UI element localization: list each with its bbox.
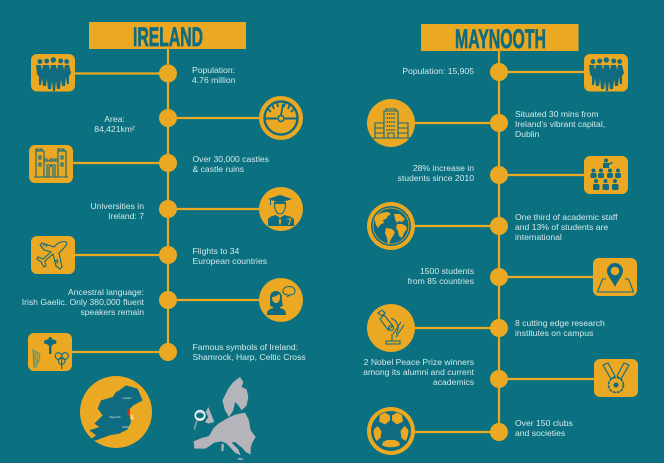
text: language: Irish Gaelic. Only 380,000 fluent xyxy=(22,297,145,307)
text: nobel: among its alumni and current xyxy=(363,367,475,377)
text: population: Population: xyxy=(192,65,235,75)
Maynooth timeline xyxy=(391,51,594,441)
text: flights: Flights to 34 xyxy=(192,246,239,256)
text: universities: Universities in xyxy=(90,201,144,211)
text: research institutes: 8 cutting edge research xyxy=(515,318,605,328)
map: Ireland: Maynooth xyxy=(110,416,121,419)
text: location: Ireland’s vibrant capital, xyxy=(515,119,605,129)
icon: microscope xyxy=(367,304,415,352)
icon: population crowd xyxy=(31,54,75,92)
text: research institutes: institutes on campus xyxy=(515,328,593,338)
icon: football xyxy=(367,407,415,455)
text: symbols: Shamrock, Harp, Celtic Cross xyxy=(192,352,306,362)
text: clubs: and societies xyxy=(515,428,565,438)
map: Europe with magnifier xyxy=(194,377,256,460)
text: castles: & castle ruins xyxy=(192,164,244,174)
text: international: One third of academic staff xyxy=(515,212,618,222)
icon: lecture audience xyxy=(584,156,628,194)
text: international: and 13% of students are xyxy=(515,222,608,232)
icon: castle xyxy=(29,145,73,183)
text: language: speakers remain xyxy=(80,307,144,317)
Ireland timeline xyxy=(72,48,260,361)
icon: area gauge xyxy=(259,96,303,140)
icon: medal xyxy=(594,359,638,397)
text: castles: Over 30,000 castles xyxy=(192,154,269,164)
text: students from countries: from 85 countries xyxy=(408,276,474,286)
text: language: Ancestral language: xyxy=(68,287,144,297)
icon: globe xyxy=(367,202,415,250)
text: universities: Ireland: 7 xyxy=(108,211,144,221)
icon: Irish symbols xyxy=(28,333,72,371)
icon: campus building xyxy=(367,99,415,147)
text: nobel: 2 Nobel Peace Prize winners xyxy=(364,357,474,367)
icon: map pin xyxy=(593,258,637,296)
heading: Ireland xyxy=(89,22,246,52)
text: international: international xyxy=(515,232,562,242)
text: flights: European countries xyxy=(192,256,267,266)
heading: Maynooth: MAYNOOTH xyxy=(455,24,546,54)
icon: language speaker xyxy=(259,278,303,322)
text: location: Situated 30 mins from xyxy=(515,109,599,119)
text: area: 84,421km² xyxy=(94,124,135,134)
map: Ireland xyxy=(80,376,152,448)
text: town population: Population: 15,905 xyxy=(402,66,474,76)
icon: town crowd xyxy=(584,54,628,92)
icon: plane xyxy=(31,236,75,274)
text: area: Area: xyxy=(104,114,125,124)
text: students from countries: 1500 students xyxy=(420,266,474,276)
text: nobel: academics xyxy=(433,377,474,387)
text: symbols: Famous symbols of Ireland: xyxy=(192,342,298,352)
text: location: Dublin xyxy=(515,129,540,139)
panel: Maynooth xyxy=(363,24,638,455)
heading: Maynooth xyxy=(421,24,578,54)
panel: Ireland xyxy=(22,22,306,460)
icon: graduate xyxy=(259,187,303,231)
text: student increase: 28% increase in xyxy=(413,163,474,173)
heading: Ireland: IRELAND xyxy=(133,22,203,52)
map: Ireland: Leinster xyxy=(123,397,132,400)
text: population: 4.76 million xyxy=(192,75,236,85)
text: clubs: Over 150 clubs xyxy=(515,418,573,428)
text: student increase: students since 2010 xyxy=(398,173,474,183)
map: Ireland: Dublin xyxy=(122,426,130,429)
